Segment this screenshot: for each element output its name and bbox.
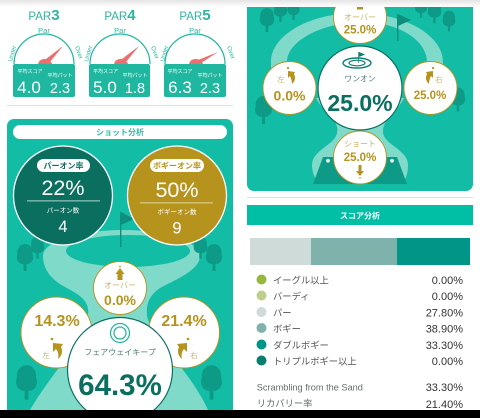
heading: shot analysis [13,125,227,139]
callout: one-on: 25.0% [327,90,393,116]
callout: left [21,297,92,368]
gauge: PAR5: PAR5 [179,7,211,24]
callout: right 25%: 25.0% [414,90,446,102]
callout: fairway keep [68,318,172,418]
callout: over: 0.0% [104,292,137,308]
stats: scrambling and recovery [257,382,463,411]
gauge: PAR3: 平均パット [47,72,73,79]
gauge: PAR5: Over [225,46,235,60]
stats: scrambling and recovery: リカバリー率 [257,398,312,408]
callout: over 25%: 25.0% [344,24,376,36]
heading: shot analysis: ショット分析 [96,127,144,137]
gauge: PAR4: 1.8 [125,81,145,97]
callout: over 25% [333,7,387,44]
callout: right: 21.4% [161,313,207,330]
trees [255,0,465,124]
gauge: PAR3: 2.3 [50,81,70,97]
flag [120,212,134,247]
callout: short 25% [334,131,386,184]
green [66,235,190,267]
callout: over: オーバー [104,281,136,290]
gauge: PAR5: 2.3 [200,81,220,97]
gauge: PAR4: 平均スコア [93,68,118,75]
bogey-on rate circle: 50% [155,178,199,202]
gauge: PAR3: PAR3 [28,7,60,24]
heading: score analysis: スコア分析 [340,210,380,220]
callout: over [94,262,146,314]
legend: score breakdown: イーグル以上 [273,274,329,286]
legend: score breakdown [256,274,463,368]
bogey-on rate circle: ボギーオン数 [158,207,197,216]
gauge: PAR4 [84,7,159,97]
gauge: PAR5: Under [160,45,170,63]
par-on rate circle: 4 [58,218,68,236]
legend: score breakdown: 38.90% [426,324,463,336]
par-on rate circle: 22% [41,176,85,200]
icon: hole rings with flag [343,52,371,68]
fairway stem [312,98,408,184]
legend: score breakdown: 0.00% [432,275,463,287]
heading: score analysis [247,205,473,225]
gauge: PAR3: 4.0 [17,78,41,97]
gauge: PAR3: Over [73,46,83,60]
callout: one-on [318,46,402,130]
gauge: PAR4: 5.0 [93,78,117,97]
callout: right: 右 [190,350,198,360]
gauge: PAR3: Par [38,26,50,35]
stacked bar chart [250,238,470,265]
callout: right 25% [404,62,457,114]
legend: score breakdown: バーディ [273,290,310,302]
legend: score breakdown: ダブルボギー [273,340,329,350]
bogey-on rate circle [128,146,226,245]
gauge: PAR5: Par [189,26,201,35]
icon: target rings [110,324,130,342]
gauge: PAR5: 6.3 [168,78,192,97]
callout: left: 左 [42,350,50,360]
gauge: PAR3: Under [8,45,18,63]
gauge: PAR3: 平均スコア [17,68,43,75]
course ring [271,15,443,68]
callout: fairway keep: フェアウェイキープ [84,348,156,357]
par-on rate circle [14,146,112,245]
legend: score breakdown: ボギー [273,324,301,334]
legend: score breakdown: トリプルボギー以上 [273,356,357,366]
stats: scrambling and recovery: 33.30% [426,382,463,394]
callout: left 0.0%: 0.0% [274,88,306,104]
stats: scrambling and recovery: Scrambling from the Sand [257,382,363,392]
callout: left 0.0% [263,62,316,114]
gauge: PAR4: Under [84,45,94,63]
gauge: PAR4: Over [149,46,159,60]
legend: score breakdown: 0.00% [432,356,463,368]
legend: score breakdown: 27.80% [426,308,463,320]
legend: score breakdown: 33.30% [426,340,463,352]
stats: scrambling and recovery: 21.40% [426,399,463,411]
callout: left 0.0%: 左 [277,74,285,84]
gauge: PAR5: 平均パット [197,72,223,79]
callout: right 25%: 右 [435,74,443,84]
gauge: PAR5: 平均スコア [167,68,193,75]
callout: short 25%: 25.0% [344,152,376,164]
tee box [313,157,407,184]
gauge: PAR5 [160,7,235,97]
gauge: PAR3 [8,7,83,97]
flag [397,14,411,41]
callout: left: 14.3% [34,313,80,330]
callout: right [148,297,220,368]
bogey-on rate circle: 9 [172,220,182,238]
legend: score breakdown: パー [273,308,292,318]
callout: fairway keep: 64.3% [78,369,162,402]
callout: short 25%: ショート [344,140,376,148]
trees [16,236,222,400]
callout: over 25%: オーバー [344,13,376,22]
panel: one-on analysis [247,0,473,191]
fairway course [30,230,208,410]
legend: score breakdown: 0.00% [432,291,463,303]
panel: shot analysis [7,119,233,418]
gauge: PAR4: Par [114,26,126,35]
gauge: PAR4: 平均パット [122,72,148,79]
bogey-on rate circle: ボギーオン率 [153,160,201,170]
par-on rate circle: パーオン数 [47,206,80,214]
par-on rate circle: パーオン率 [44,160,84,170]
gauge: PAR4: PAR4 [104,7,136,24]
callout: one-on: ワンオン [344,74,376,84]
